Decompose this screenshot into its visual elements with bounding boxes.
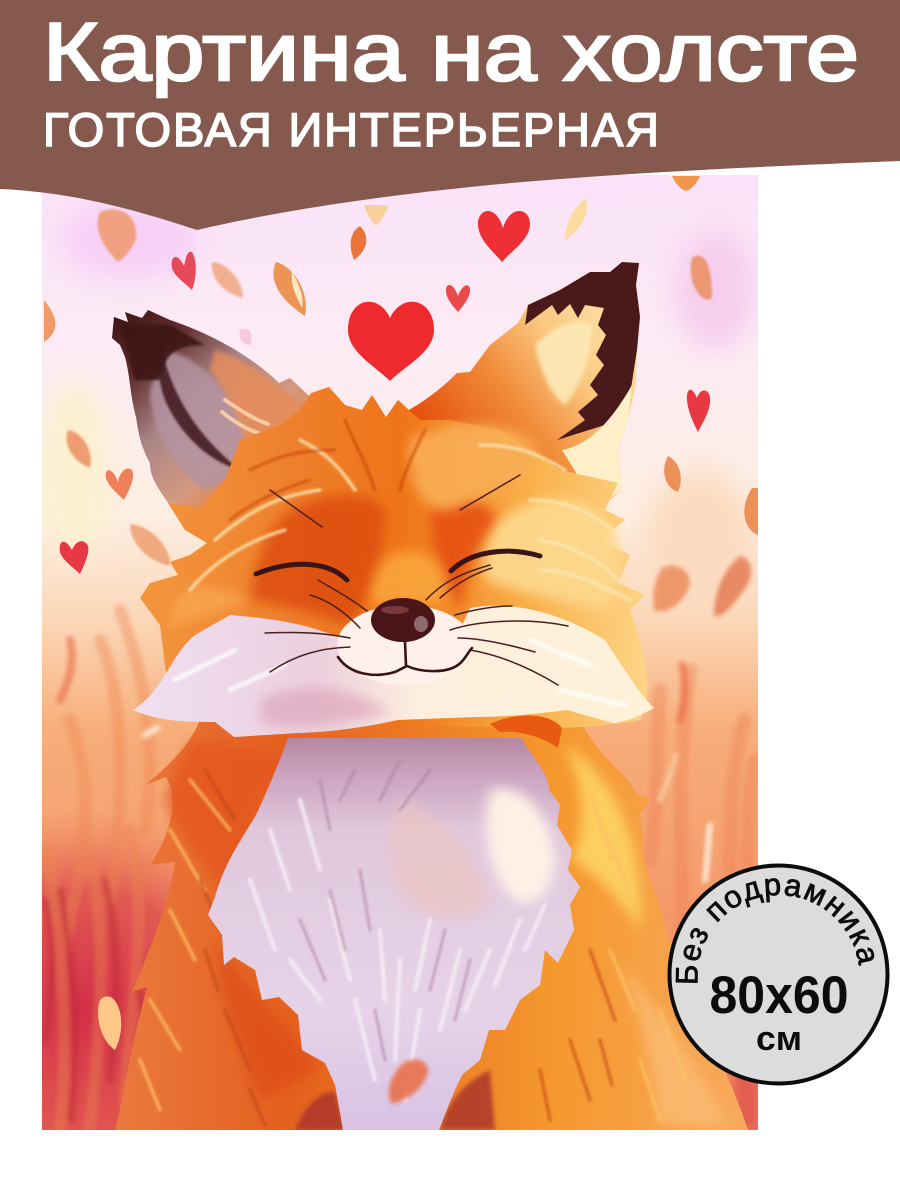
right ear [409,262,640,500]
right ear white side [562,385,632,505]
deep orange around the eyes [250,495,385,625]
size badge [668,864,890,1116]
shaded lower cheek [260,688,390,726]
muzzle [337,605,473,685]
bright fur on the right side [565,745,640,930]
left ear dark inner fur [158,360,232,468]
right closed eye [451,551,540,571]
subtitle: ГОТОВАЯ ИНТЕРЬЕРНАЯ [43,103,659,156]
head fur strokes [190,420,630,600]
hearts [60,211,710,574]
dark fur shadows on the left side [165,740,285,890]
fox body [115,720,748,1130]
badge arc text: Без подрамника [676,878,874,983]
warm glow on chest [486,788,555,903]
orange patch under right cheek [490,715,562,748]
body fur strokes [140,770,685,1125]
left closed eye [256,564,347,580]
fox head [133,387,654,748]
badge unit: см [756,1020,802,1058]
whiskers [265,475,568,685]
left ear [112,310,309,508]
white chest fur [208,738,580,1130]
right ear dark tip [525,262,640,440]
brown header banner [0,0,900,230]
canvas picture: smiling fox [40,175,758,1130]
nose [371,598,435,642]
grass blades [45,610,755,1130]
left ear lilac inner [150,350,244,490]
white cheeks [133,606,654,737]
right ear pale fur [535,322,592,405]
smile [338,642,472,675]
picture background [40,175,758,1130]
badge size: 80x60 [710,966,848,1025]
floating petals [44,176,758,1050]
title: Картина на холсте [43,7,859,98]
pale right forehead [409,424,540,510]
